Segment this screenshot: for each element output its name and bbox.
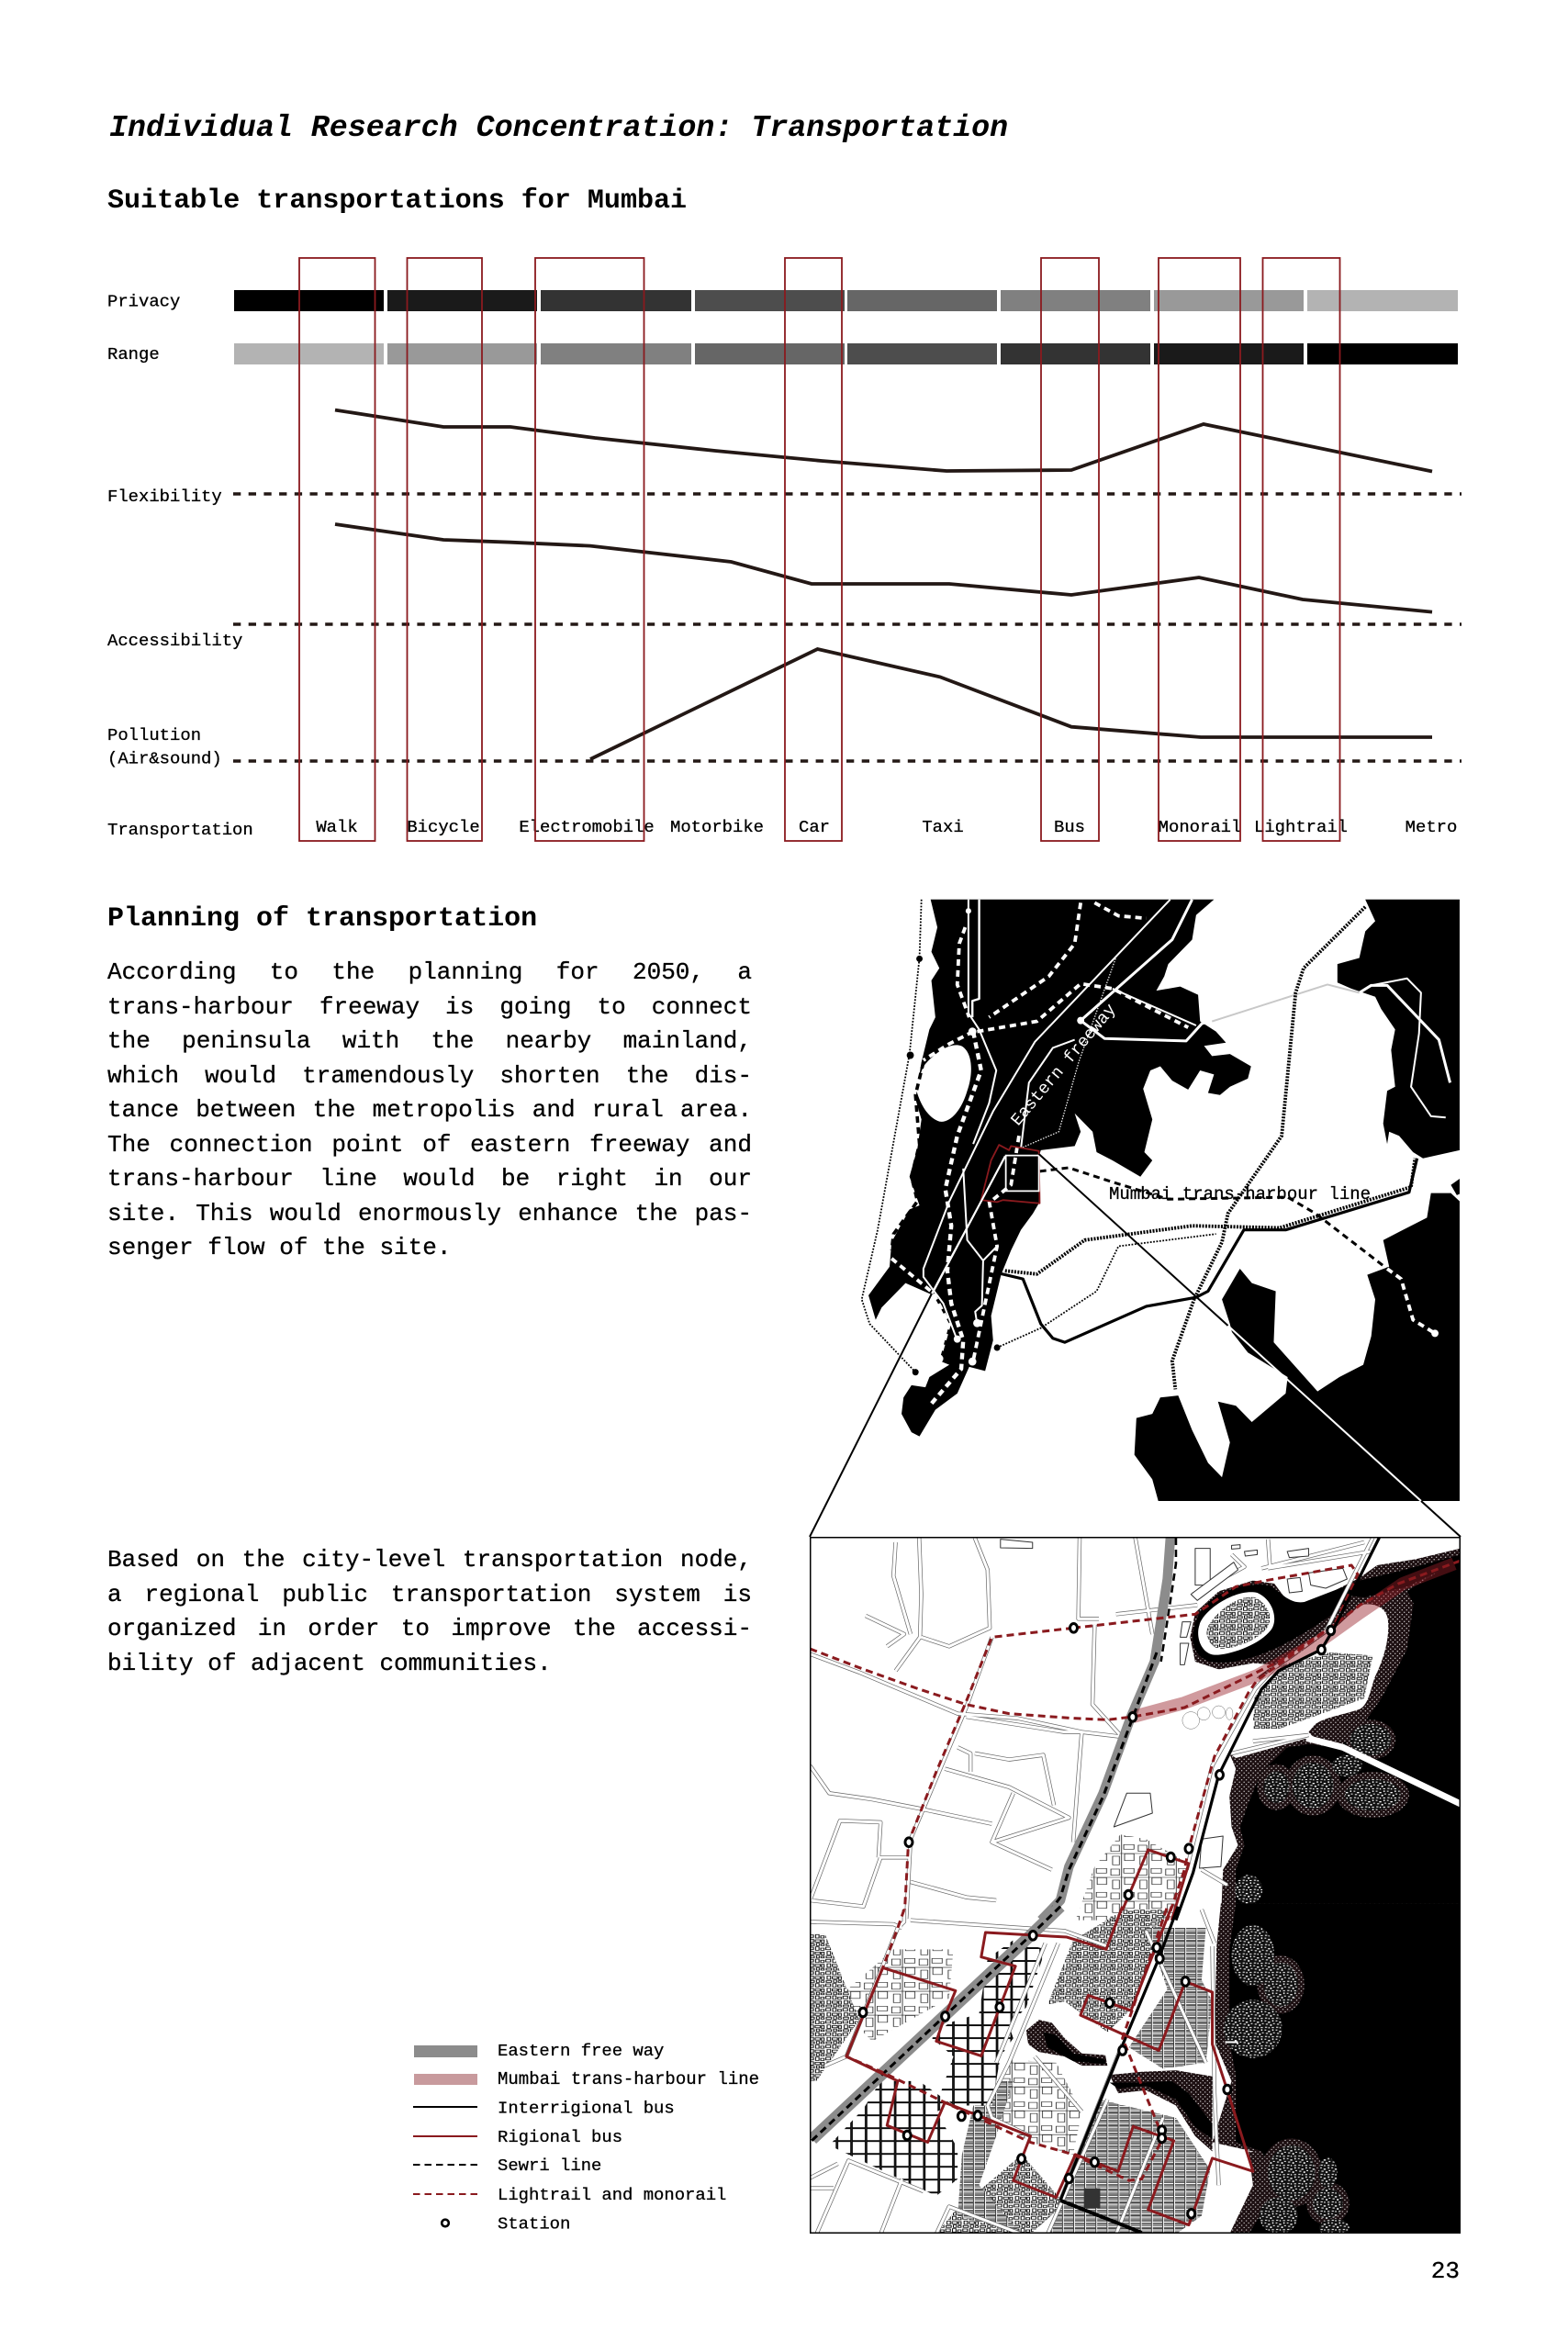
line: pollution [590, 649, 1432, 759]
text block: regional system paragraph: organized in order to improve the accessi- [107, 1615, 752, 1642]
island clusters [1258, 1719, 1409, 1818]
row label: accessibility: Accessibility [107, 631, 242, 651]
heading: planning of transportation: Planning of transportation [107, 903, 537, 935]
block pattern [1075, 1834, 1189, 1921]
text block: planning paragraph: which would tramendously shorten the dis- [107, 1061, 752, 1089]
nodes [907, 956, 1001, 1375]
transport mode labels: Bicycle [407, 817, 480, 837]
text block: regional system paragraph: Based on the city-level transportation node, [107, 1546, 752, 1574]
chart: transportation comparison [107, 258, 1462, 841]
shoreline band [1190, 1549, 1461, 1921]
title: Individual Research Concentration: Transportation [109, 110, 1008, 145]
site roads [810, 1538, 1372, 1919]
legend [413, 2041, 759, 2235]
row label: transportation: Transportation [107, 820, 253, 840]
map: city-level transportation [862, 900, 1460, 1501]
oval island [1198, 1592, 1274, 1655]
legend: Station: Station [498, 2214, 570, 2235]
legend: Rigional bus: Rigional bus [498, 2127, 622, 2147]
white dashed rail on land [891, 902, 1435, 1404]
transport mode labels: Walk [316, 817, 358, 837]
legend: Sewri line: Sewri line [498, 2156, 601, 2176]
upper part of site map [810, 1538, 1461, 1921]
row label: range: Range [107, 344, 160, 364]
freeway band [1041, 1538, 1170, 1921]
harbour water lower [1229, 1903, 1462, 2235]
text block: planning paragraph [106, 958, 752, 1261]
legend: Lightrail and monorail: Lightrail and monorail [498, 2185, 726, 2205]
inland pond [1026, 2020, 1107, 2066]
text block: regional system paragraph: a regional public transportation system is [107, 1581, 752, 1608]
white roads on land [924, 900, 1450, 1340]
text block: planning paragraph: the peninsula with the nearby mainland, [107, 1027, 752, 1055]
text block: planning paragraph: senger flow of the site. [107, 1234, 451, 1261]
row label: privacy: Privacy [107, 292, 180, 312]
land: Mumbai peninsula [868, 900, 1251, 1437]
text block: planning paragraph: trans-harbour line would be right in our [107, 1165, 752, 1193]
heading: suitable transportations: Suitable transportations for Mumbai [107, 185, 687, 217]
map frame [810, 1537, 1461, 2234]
lower part of site map [808, 1903, 1462, 2237]
text block: planning paragraph: The connection point of eastern freeway and [107, 1131, 752, 1159]
stations [859, 1623, 1335, 2218]
freeway band lower [812, 1907, 1060, 2139]
text block: planning paragraph: According to the planning for 2050, a [107, 958, 752, 986]
shoreline band lower [1213, 1903, 1462, 2235]
peninsula land [1229, 1604, 1388, 1758]
legend: Interrigional bus: Interrigional bus [498, 2099, 675, 2119]
interregional bus lower [1060, 1907, 1178, 2201]
black routes on water [862, 900, 1417, 1389]
bar: privacy scale [234, 290, 1458, 311]
harbour line band [1133, 1563, 1454, 1717]
text block: regional system paragraph [107, 1546, 752, 1676]
harbour water [1236, 1558, 1461, 1921]
row label: flexibility: Flexibility [107, 487, 222, 507]
transport mode labels: Electromobile [519, 817, 655, 837]
page number: 23 [1431, 2257, 1460, 2285]
island clusters lower [1258, 1955, 1350, 2225]
bar: range scale [234, 343, 1458, 364]
interregional bus [1176, 1538, 1379, 1921]
row label: pollution: Pollution [107, 725, 201, 745]
transport mode labels: Car [799, 817, 830, 837]
lightrail and monorail [810, 1561, 1461, 1921]
zoom connector lines [810, 1154, 1461, 1537]
sewri line [1161, 1538, 1176, 1662]
text block: planning paragraph: site. This would enormously enhance the pas- [107, 1199, 752, 1227]
line: flexibility [335, 410, 1432, 472]
legend: Eastern free way: Eastern free way [498, 2041, 664, 2061]
lightrail lower [846, 1907, 1168, 2180]
lagoon channel [1193, 1554, 1461, 1663]
line: accessibility [335, 524, 1432, 612]
legend: Station [442, 2214, 570, 2235]
text block: planning paragraph: trans-harbour freeway is going to connect [107, 993, 752, 1021]
grid neighbourhoods [829, 1940, 1046, 2196]
regional bus lower [846, 1907, 1253, 2225]
transport mode labels: Monorail [1159, 817, 1241, 837]
land: south-east mainland [1135, 1193, 1460, 1501]
lake [915, 1045, 971, 1122]
transport mode labels: Bus [1054, 817, 1085, 837]
peninsula buildings [1253, 1652, 1372, 1729]
legend: Eastern free way [414, 2041, 664, 2061]
site blocks [1047, 1910, 1168, 2032]
roads lower [808, 1910, 1219, 2235]
small buildings top [1001, 1540, 1347, 1868]
transport mode labels: Taxi [922, 817, 964, 837]
text block: regional system paragraph: bility of adjacent communities. [107, 1649, 552, 1676]
transport mode labels: Lightrail [1254, 817, 1348, 837]
highlight boxes: suitable modes [299, 258, 1340, 841]
map label: Mumbai trans-harbour line: Mumbai trans-harbour line [1109, 1184, 1371, 1204]
map label: Eastern freeway: Eastern freeway [1008, 1001, 1121, 1130]
regional bus [1118, 1850, 1189, 1921]
text block: planning paragraph: tance between the metropolis and rural area. [107, 1096, 752, 1124]
causeway [1306, 1738, 1461, 1804]
legend: Mumbai trans-harbour line: Mumbai trans-harbour line [498, 2069, 759, 2089]
site outline [981, 1145, 1039, 1204]
ponds beside road [1182, 1706, 1233, 1729]
transport mode labels: Motorbike [670, 817, 764, 837]
dense hatch blocks [958, 1928, 1213, 2235]
transport mode labels [316, 817, 1457, 837]
map: regional transportation system [808, 1537, 1462, 2237]
row label: pollution: (Air&sound) [107, 749, 222, 769]
land: north-east mainland [1338, 900, 1460, 1159]
white land strip [1213, 2148, 1261, 2235]
transport mode labels: Metro [1406, 817, 1457, 837]
